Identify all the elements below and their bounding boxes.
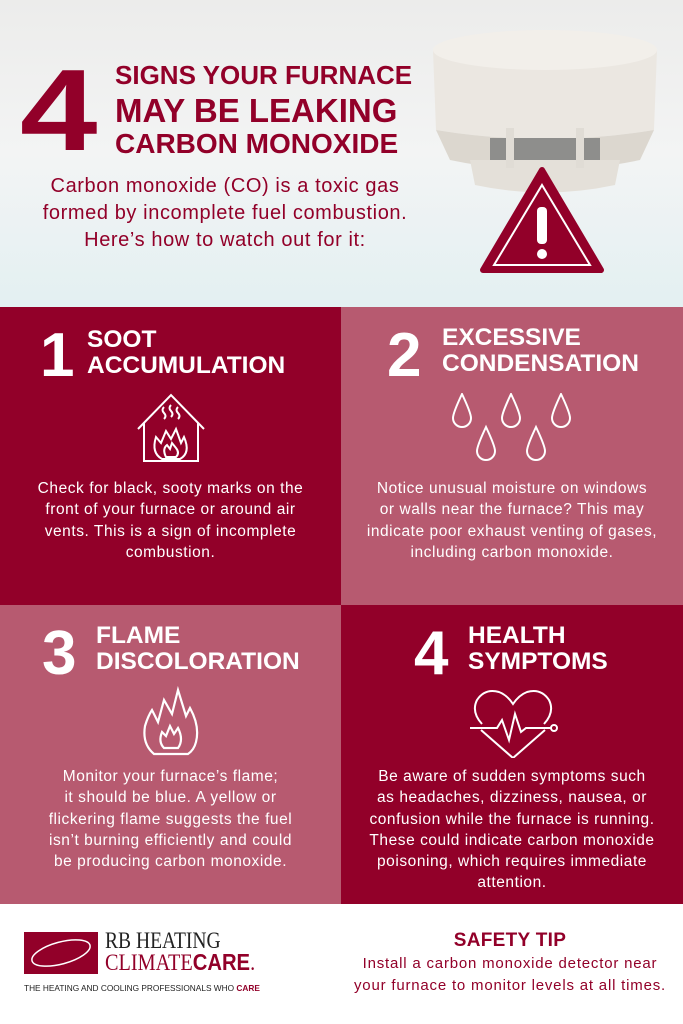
heading <box>468 622 608 675</box>
logo: RB Heating ClimateCare: CLIMATECARE. <box>105 949 255 975</box>
heading: EXCESSIVE <box>442 324 581 351</box>
heading <box>96 622 300 675</box>
text: These could indicate carbon monoxide <box>369 832 655 849</box>
heading: CONDENSATION <box>442 350 639 377</box>
text: Monitor your furnace’s flame; <box>63 768 278 785</box>
logo: RB Heating ClimateCare <box>24 928 260 993</box>
subtitle: formed by incomplete fuel combustion. <box>43 202 407 224</box>
icon: heart with pulse <box>470 690 558 758</box>
panel: 3 flame discoloration <box>0 605 341 904</box>
title big number 4: 4 <box>20 45 97 175</box>
text: isn’t burning efficiently and could <box>49 832 292 849</box>
subtitle <box>43 175 407 251</box>
title: SIGNS YOUR FURNACE <box>115 60 412 90</box>
text <box>38 480 303 561</box>
safety tip: your furnace to monitor levels at all times. <box>354 977 666 994</box>
text: including carbon monoxide. <box>410 544 614 561</box>
text: combustion. <box>126 544 215 561</box>
icon: flame <box>143 686 198 756</box>
heading: SOOT <box>87 326 156 353</box>
text: confusion while the furnace is running. <box>369 811 655 828</box>
safety tip <box>354 930 666 994</box>
subtitle: Carbon monoxide (CO) is a toxic gas <box>51 175 399 197</box>
panel: 2 excessive condensation <box>341 307 683 605</box>
icon: house fire <box>137 394 205 462</box>
text: or walls near the furnace? This may <box>380 501 644 518</box>
heading <box>87 326 285 379</box>
text: attention. <box>477 874 547 891</box>
text: as headaches, dizziness, nausea, or <box>377 789 647 806</box>
text <box>367 480 657 561</box>
number 3: 3 <box>42 619 76 688</box>
number 4: 4 <box>414 619 448 688</box>
safety tip: SAFETY TIP <box>454 930 566 951</box>
heading: FLAME <box>96 622 180 649</box>
icon: warning triangle <box>483 170 601 270</box>
panel: 1 soot accumulation <box>0 307 341 605</box>
tagline: THE HEATING AND COOLING PROFESSIONALS WHO CARE <box>24 983 260 993</box>
panel: 4 health symptoms <box>341 605 683 904</box>
number 1: 1 <box>40 321 74 390</box>
logo: RB Heating ClimateCare: RB HEATING <box>105 928 221 953</box>
heading: SYMPTOMS <box>468 648 608 675</box>
title: CARBON MONOXIDE <box>115 128 398 159</box>
text: vents. This is a sign of incomplete <box>45 523 296 540</box>
text: be producing carbon monoxide. <box>54 853 287 870</box>
text: poisoning, which requires immediate <box>377 853 647 870</box>
header background <box>0 0 683 307</box>
logo mark <box>24 932 98 974</box>
number 2: 2 <box>387 321 421 390</box>
text: indicate poor exhaust venting of gases, <box>367 523 657 540</box>
text: flickering flame suggests the fuel <box>49 811 292 828</box>
heading: ACCUMULATION <box>87 352 285 379</box>
title <box>115 60 412 159</box>
text: Notice unusual moisture on windows <box>377 480 647 497</box>
title: MAY BE LEAKING <box>115 92 397 129</box>
text: Be aware of sudden symptoms such <box>378 768 646 785</box>
text: Check for black, sooty marks on the <box>38 480 303 497</box>
heading <box>442 324 639 377</box>
text <box>48 768 292 870</box>
icon: water drops <box>452 393 571 461</box>
text: front of your furnace or around air <box>45 501 296 518</box>
subtitle: Here’s how to watch out for it: <box>84 229 366 251</box>
heading: DISCOLORATION <box>96 648 300 675</box>
text <box>369 768 655 891</box>
safety tip: Install a carbon monoxide detector near <box>363 955 657 972</box>
smoke detector image <box>433 52 657 273</box>
text: it should be blue. A yellow or <box>64 789 277 806</box>
heading: HEALTH <box>468 622 566 649</box>
